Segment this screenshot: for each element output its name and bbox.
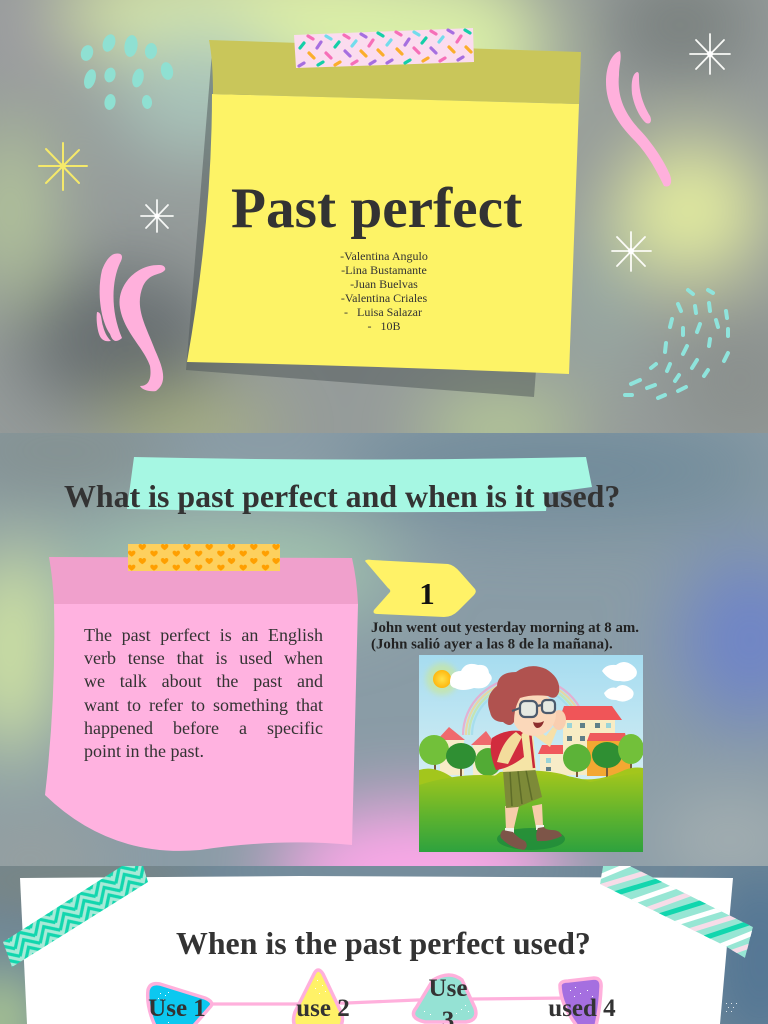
- face: [512, 692, 556, 736]
- decoration: white sparkle left: [141, 200, 173, 232]
- near arm: [497, 732, 522, 764]
- sun: [426, 663, 458, 695]
- shoes: [500, 827, 562, 850]
- authors list: [340, 249, 428, 333]
- grass hills: [419, 768, 643, 785]
- sprinkles row D: [299, 57, 463, 66]
- speckles: [158, 992, 169, 1023]
- washi tape: sprinkles: [294, 28, 474, 68]
- sprinkles row B: [300, 36, 461, 48]
- definition paragraph: want to refer to something that: [84, 695, 323, 715]
- scene sky: [419, 655, 643, 780]
- heart washi tape: [128, 544, 280, 571]
- ground shadow: [497, 828, 565, 850]
- definition paragraph: happened before a specific: [84, 718, 323, 738]
- definition paragraph: we talk about the past and: [84, 671, 323, 691]
- shirt: [502, 732, 536, 772]
- note shadow: [186, 52, 536, 397]
- decoration: mint dashes: [625, 290, 728, 398]
- hand: [552, 710, 566, 730]
- authors list: -Valentina Angulo: [340, 249, 428, 263]
- speckles: [570, 987, 593, 997]
- example sentence: John went out yesterday morning at 8 am.: [371, 620, 639, 636]
- definition paragraph: verb tense that is used when: [84, 648, 323, 668]
- speckles: [424, 1005, 469, 1015]
- chevron tape left: [3, 866, 148, 967]
- slide 2 background: [0, 433, 768, 866]
- houses: [437, 706, 630, 777]
- slide 3 white paper: [20, 876, 733, 1024]
- rainbow: [462, 682, 580, 735]
- boy figure: [488, 666, 566, 850]
- speckles: [315, 980, 326, 994]
- node: use 2: [294, 970, 350, 1024]
- yellow arrow badge: [365, 560, 476, 617]
- note top fold: [209, 40, 581, 104]
- node: use 3: Use: [429, 975, 467, 1002]
- slide 1 background: [0, 0, 768, 464]
- authors list: -Lina Bustamante: [341, 263, 427, 277]
- mouth: [533, 721, 544, 728]
- node: used 4: [548, 978, 616, 1024]
- definition paragraph: point in the past.: [84, 741, 204, 761]
- red straps: [519, 732, 536, 768]
- note body: [187, 94, 579, 374]
- slide 1: sticky note: [186, 40, 581, 397]
- trees: [419, 734, 644, 779]
- authors list: - Luisa Salazar: [344, 305, 422, 319]
- backpack: [491, 731, 524, 770]
- node: use 3: [413, 975, 476, 1024]
- short stripes: [510, 770, 532, 806]
- decoration: white sparkle mid right: [612, 232, 651, 271]
- authors list: - 10B: [368, 319, 400, 333]
- node: use 1: Use 1: [148, 995, 206, 1022]
- slide 2 heading: What is past perfect and when is it used?: [64, 479, 620, 514]
- stripe tape right: [600, 866, 753, 958]
- slide 3 background: [0, 852, 768, 1024]
- badge number: 1: [419, 576, 435, 611]
- clouds: [450, 662, 637, 702]
- decoration: tiny white dots: [726, 1003, 737, 1012]
- slide 2 mint banner: [127, 457, 592, 512]
- decoration: pink swirl left: [97, 253, 165, 391]
- example sentence: (John salió ayer a las 8 de la mañana).: [371, 636, 613, 652]
- authors list: -Valentina Criales: [341, 291, 427, 305]
- pink note fold: [49, 557, 358, 604]
- timeline connector: [205, 998, 570, 1004]
- hair: [488, 666, 559, 725]
- decoration: pink swirl right: [606, 51, 671, 186]
- node: use 1: [148, 984, 212, 1024]
- decoration: white sparkle top right: [690, 34, 730, 74]
- sprinkles row A: [308, 30, 470, 39]
- node: use 2: use 2: [296, 995, 350, 1022]
- definition paragraph: [84, 625, 323, 761]
- definition paragraph: The past perfect is an English: [84, 625, 323, 645]
- example sentence: [371, 620, 639, 652]
- legs: [505, 804, 543, 828]
- shorts: [503, 768, 542, 808]
- node: used 4: used 4: [548, 995, 616, 1022]
- decoration: yellow sparkle: [39, 143, 87, 190]
- socks: [505, 825, 544, 833]
- illustration: boy walking: [419, 655, 644, 852]
- pink note body: [45, 604, 358, 851]
- waving arm: [532, 727, 557, 747]
- slide 3 heading: When is the past perfect used?: [176, 926, 591, 961]
- title: Past perfect: [231, 177, 522, 240]
- authors list: -Juan Buelvas: [350, 277, 418, 291]
- slide 2 pink note: [45, 557, 358, 851]
- decoration: mint dots: [79, 32, 175, 111]
- glasses: [512, 700, 555, 717]
- sprinkles row C: [309, 47, 471, 58]
